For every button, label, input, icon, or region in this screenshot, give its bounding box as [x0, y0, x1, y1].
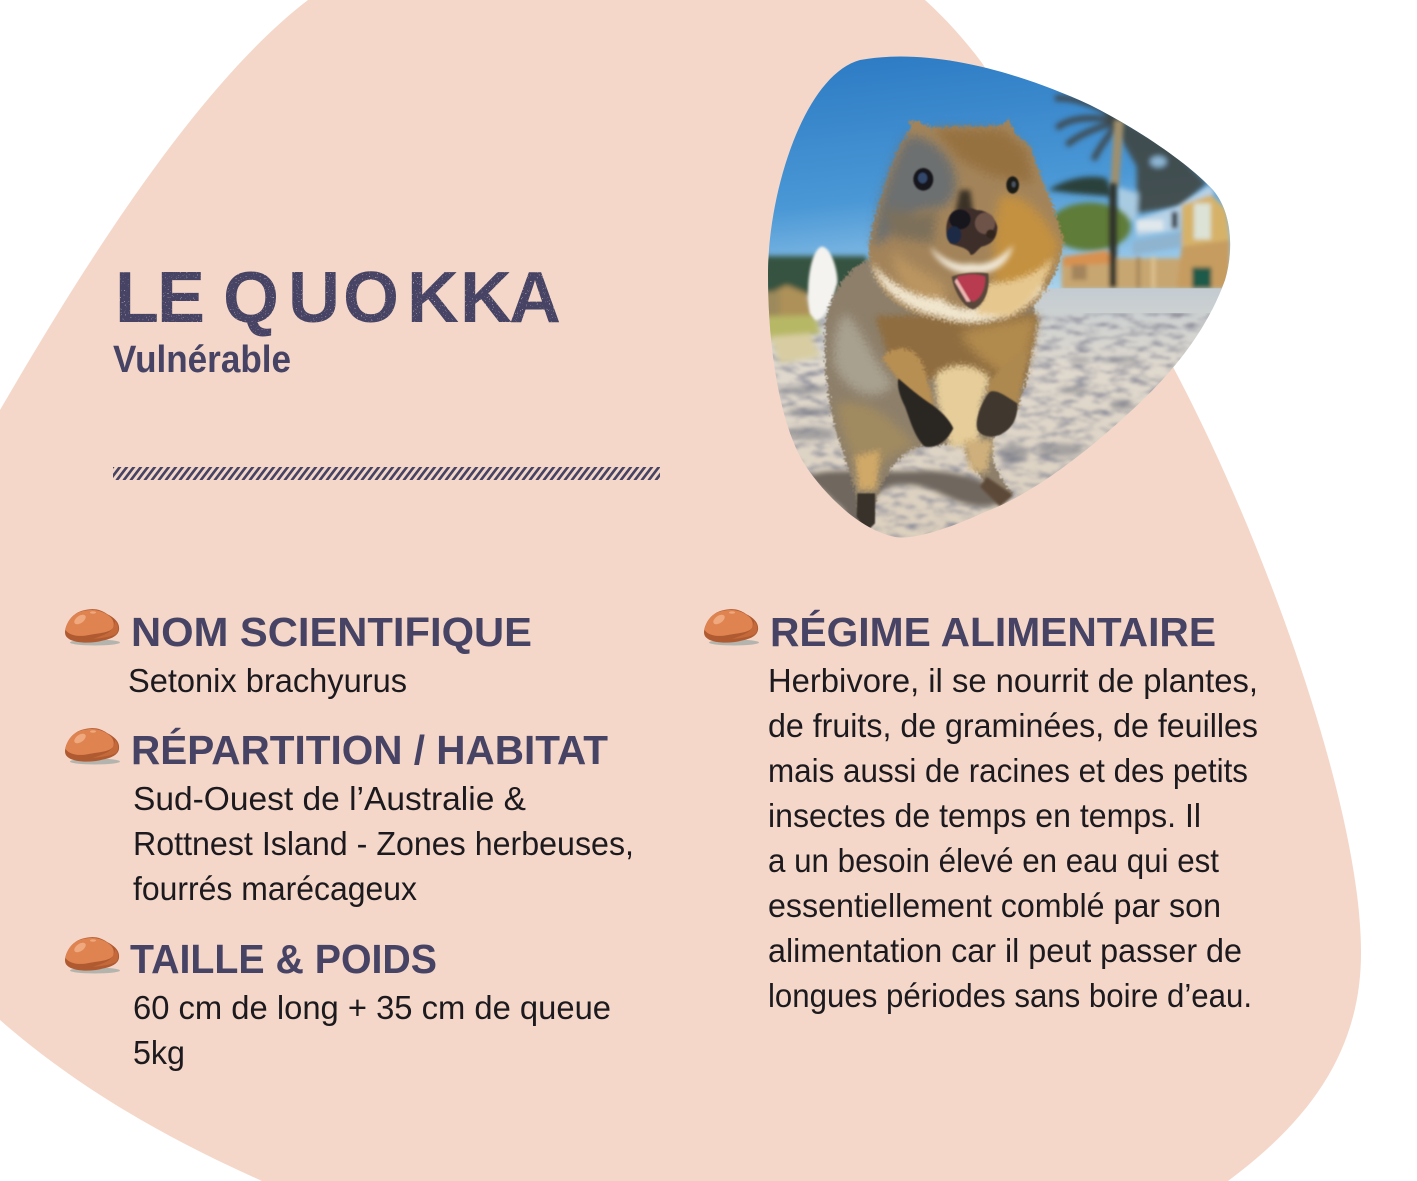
- block: taille & poids: [65, 936, 611, 1071]
- white bird: [808, 247, 837, 320]
- head base: [868, 118, 1063, 324]
- icon: rock: [65, 728, 120, 764]
- text: diet: Herbivore, il se nourrit de plantes,: [768, 662, 1258, 699]
- heading: répartition / habitat: RÉPARTITION / HABITAT: [131, 727, 608, 773]
- top of head: [933, 128, 1033, 183]
- text: size and weight: [133, 989, 611, 1071]
- palm trunk: [1111, 120, 1124, 187]
- block: régime alimentaire: [704, 609, 1258, 1014]
- mouth: [952, 273, 989, 309]
- palm and dark trees: [1048, 98, 1207, 223]
- cream under chin: [977, 257, 1053, 317]
- quokka: [825, 118, 1063, 532]
- text: diet: [768, 662, 1258, 1014]
- photo: quokka on the beach: [760, 50, 1240, 555]
- brown chest top: [875, 313, 1038, 387]
- lower cheek: [892, 254, 948, 300]
- text: diet: essentiellement comblé par son: [768, 887, 1221, 924]
- fur body and head: [825, 118, 1063, 524]
- grey face side: [873, 136, 956, 247]
- text: size and weight: 5kg: [133, 1034, 185, 1071]
- sand beach: [769, 288, 1222, 538]
- heading: nom scientifique: NOM SCIENTIFIQUE: [131, 609, 532, 655]
- sky: [760, 50, 1240, 310]
- icon: rock: [65, 937, 120, 974]
- dark stripe above nose: [955, 190, 973, 213]
- hatched divider: [113, 467, 660, 480]
- text: habitat: fourrés marécageux: [133, 870, 417, 907]
- buildings: [1062, 183, 1230, 289]
- text: scientific name: Setonix brachyurus: [128, 662, 407, 699]
- right paw: [977, 391, 1017, 437]
- cream belly: [935, 365, 990, 447]
- text: habitat: Rottnest Island - Zones herbeuses,: [133, 825, 634, 862]
- text: habitat: Sud-Ouest de l’Australie &: [133, 780, 526, 817]
- block: répartition / habitat: [65, 727, 634, 907]
- text: diet: longues périodes sans boire d’eau.: [768, 977, 1252, 1014]
- muzzle: [930, 245, 1013, 273]
- heading: taille & poids: TAILLE & POIDS: [130, 936, 437, 982]
- text: diet: a un besoin élevé en eau qui est: [768, 842, 1219, 879]
- ground shadow under quokka: [807, 471, 1010, 525]
- subtitle: status: Vulnérable: [113, 339, 291, 381]
- block: nom scientifique: [65, 609, 532, 699]
- icon: rock: [65, 609, 120, 646]
- left arm: [882, 348, 934, 413]
- text: diet: mais aussi de racines et des petits: [768, 752, 1248, 789]
- text: diet: alimentation car il peut passer de: [768, 932, 1242, 969]
- grey flank: [834, 313, 893, 395]
- heading: régime alimentaire: RÉGIME ALIMENTAIRE: [770, 609, 1216, 655]
- left paw: [898, 378, 953, 447]
- green tree: [1049, 203, 1131, 251]
- golden chest: [960, 317, 1037, 383]
- sand shadows: [777, 357, 1140, 463]
- title: LE QUOKKA: [115, 258, 561, 338]
- icon: rock: [704, 609, 759, 646]
- body: [825, 260, 1037, 524]
- text: diet: de fruits, de graminées, de feuilles: [768, 707, 1258, 744]
- distant vegetation left: [760, 256, 867, 363]
- golden right cheek: [993, 196, 1060, 288]
- right arm: [985, 358, 1027, 410]
- eyes: [913, 168, 1019, 194]
- nose: [946, 208, 997, 255]
- text: diet: insectes de temps en temps. Il: [768, 797, 1201, 834]
- feet: [857, 493, 875, 532]
- sand texture: [772, 313, 1210, 538]
- white ruff: [872, 263, 1043, 322]
- legs: [855, 450, 880, 490]
- dark lower cheek left: [883, 207, 937, 243]
- thigh: [837, 400, 917, 464]
- text: habitat: [133, 780, 634, 907]
- text: size and weight: 60 cm de long + 35 cm de queue: [133, 989, 611, 1026]
